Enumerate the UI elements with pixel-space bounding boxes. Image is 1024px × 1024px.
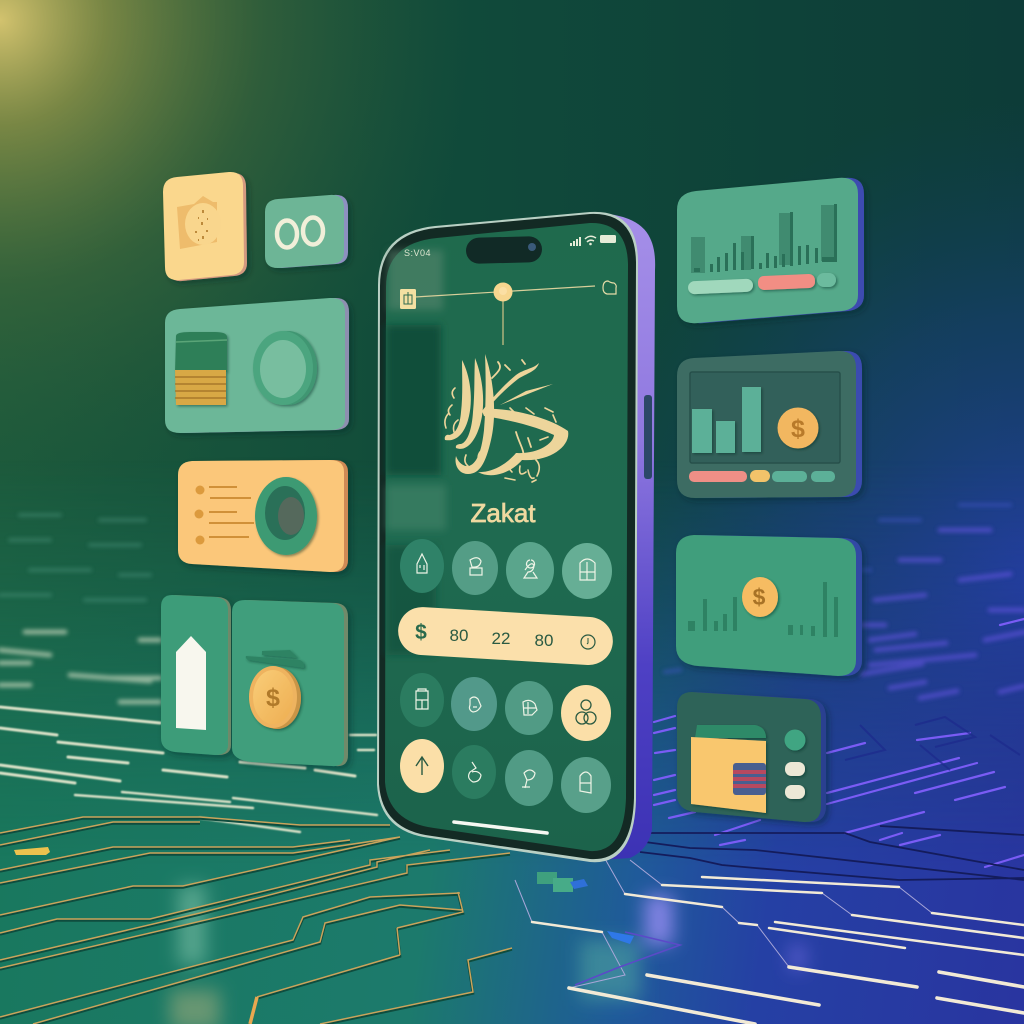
panel: wallet card: [677, 692, 826, 822]
icon: dollar coin: [778, 408, 818, 448]
bar chart: [691, 204, 837, 273]
panel: dark chart card: [677, 351, 862, 498]
panel: arrow card: [161, 595, 231, 755]
blue chip: [607, 931, 634, 944]
panel: coin stack card: [165, 298, 349, 433]
button row 1: [400, 539, 612, 599]
pills: [689, 470, 835, 482]
icon: shield emblem: [177, 196, 221, 249]
pale upper traces left: [0, 707, 377, 832]
button row 3: [400, 739, 611, 813]
light reflections: [170, 885, 805, 1024]
gold traces left: [0, 818, 512, 1024]
button row 2: [400, 673, 611, 741]
icon: dollar coin: [742, 577, 778, 617]
icon: double rings: [277, 218, 323, 248]
bars: [692, 387, 761, 453]
icon: coin with tab: [246, 650, 304, 729]
list lines: [194, 486, 254, 544]
app name: Zakat: [470, 498, 536, 528]
amount pill: $: [415, 621, 427, 644]
inner chart screen: [690, 372, 840, 463]
notch: [466, 236, 542, 264]
panel: orange list card: [178, 460, 348, 572]
status pills: [688, 273, 836, 294]
home indicator: [454, 822, 547, 833]
amount pill: 80: [535, 631, 553, 650]
bar chart right: [788, 582, 838, 637]
panel: bar chart card: [677, 178, 864, 323]
status icons: [570, 235, 616, 246]
icon: white arrow: [176, 636, 206, 730]
amount pill: [397, 606, 614, 666]
icon: wallet with coins: [691, 725, 766, 813]
panel: rings tile: [265, 195, 348, 268]
icon: coin stack: [175, 332, 227, 405]
circuit floor: [0, 460, 1024, 1024]
purple traces right: [654, 619, 1024, 867]
phone: [377, 212, 655, 862]
top slider line: [400, 281, 616, 345]
panel: coin card: [232, 600, 348, 766]
green blocks: [537, 872, 588, 892]
screen: [385, 223, 628, 851]
blurred distant dashes: [0, 505, 1024, 702]
icon: dollar coin: $: [753, 584, 766, 610]
gold chip: [14, 847, 50, 855]
dark and white traces right: [515, 826, 1024, 988]
icon: dollar coin: $: [791, 415, 805, 443]
screen bezel: [379, 214, 636, 859]
bar chart left: [688, 597, 737, 631]
amount pill: 22: [492, 629, 510, 648]
panel: coin chart card: [676, 535, 862, 676]
screen reflections: [386, 250, 446, 655]
icon: green lens: [255, 477, 317, 555]
buttons: [784, 730, 806, 799]
panel: shield tile: [163, 172, 247, 281]
calligraphy emblem: [445, 354, 568, 482]
phone frame: [377, 212, 638, 862]
tapered vertical strokes: [445, 354, 568, 475]
icon: green coin: [253, 331, 317, 405]
amount pill: 80: [450, 626, 468, 645]
main swoosh: [478, 363, 568, 475]
side button: [644, 395, 652, 479]
icon: coin with tab: $: [266, 684, 280, 712]
status bar time: S:V04: [404, 248, 431, 258]
phone side rail: [600, 213, 655, 860]
